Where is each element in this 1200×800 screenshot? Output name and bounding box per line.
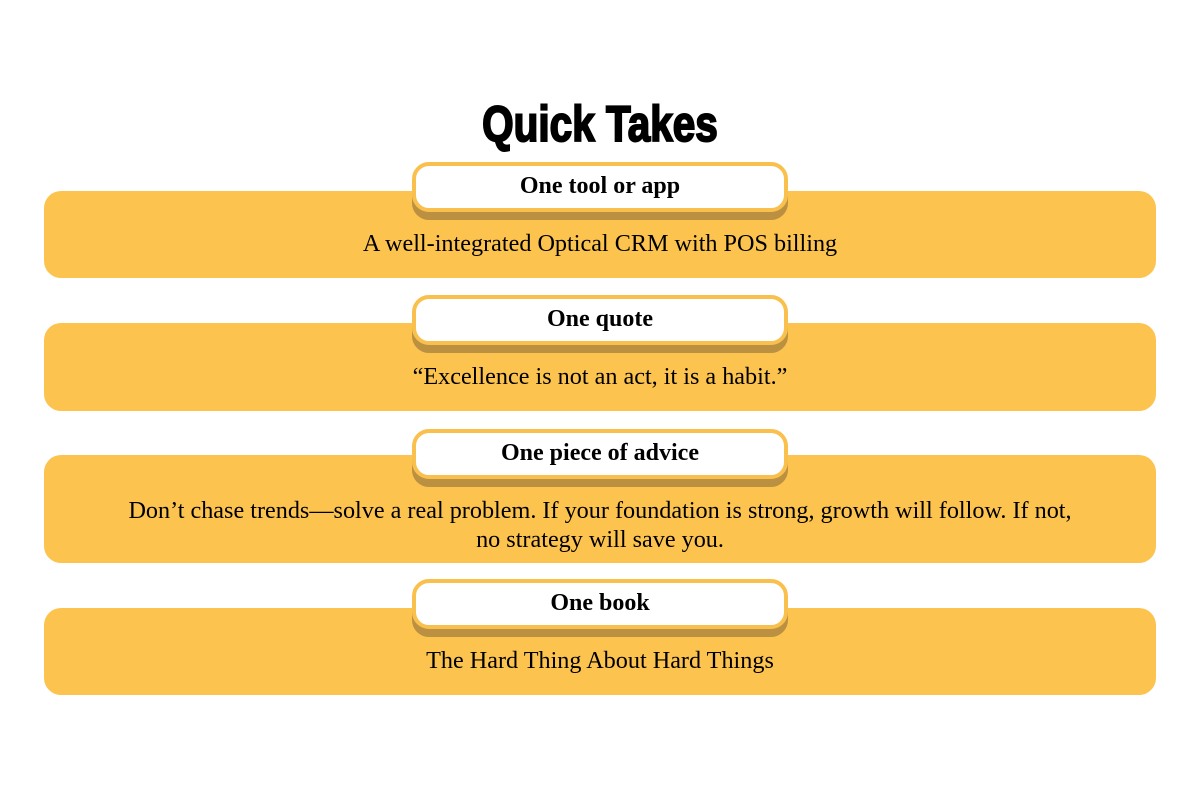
body text: “Excellence is not an act, it is a habit.” [413,363,787,390]
panel: one piece of advice [44,429,1156,563]
panel: one tool or app [44,162,1156,278]
pill heading: One tool or app [520,173,680,199]
body text [128,497,1072,553]
body text: no strategy will save you. [476,526,724,553]
pill heading [412,429,788,479]
panel: one quote [44,295,1156,411]
panel background [44,191,1156,278]
pill shadow [412,305,788,353]
panel background [44,608,1156,695]
pill heading [412,162,788,212]
body text: A well-integrated Optical CRM with POS billing [363,230,837,257]
body text: Don’t chase trends—solve a real problem. If your foundation is strong, growth will follow. If not, [128,497,1072,524]
pill heading: One book [550,590,650,616]
panel background [44,455,1156,563]
pill heading [412,295,788,345]
panel: one book [44,579,1156,695]
pill heading: One quote [547,306,653,332]
pill heading: One piece of advice [501,440,699,466]
pill shadow [412,589,788,637]
title: Quick Takes [482,96,718,152]
body text: The Hard Thing About Hard Things [426,647,774,674]
panel background [44,323,1156,411]
pill heading [412,579,788,629]
pill shadow [412,439,788,487]
pill shadow [412,172,788,220]
